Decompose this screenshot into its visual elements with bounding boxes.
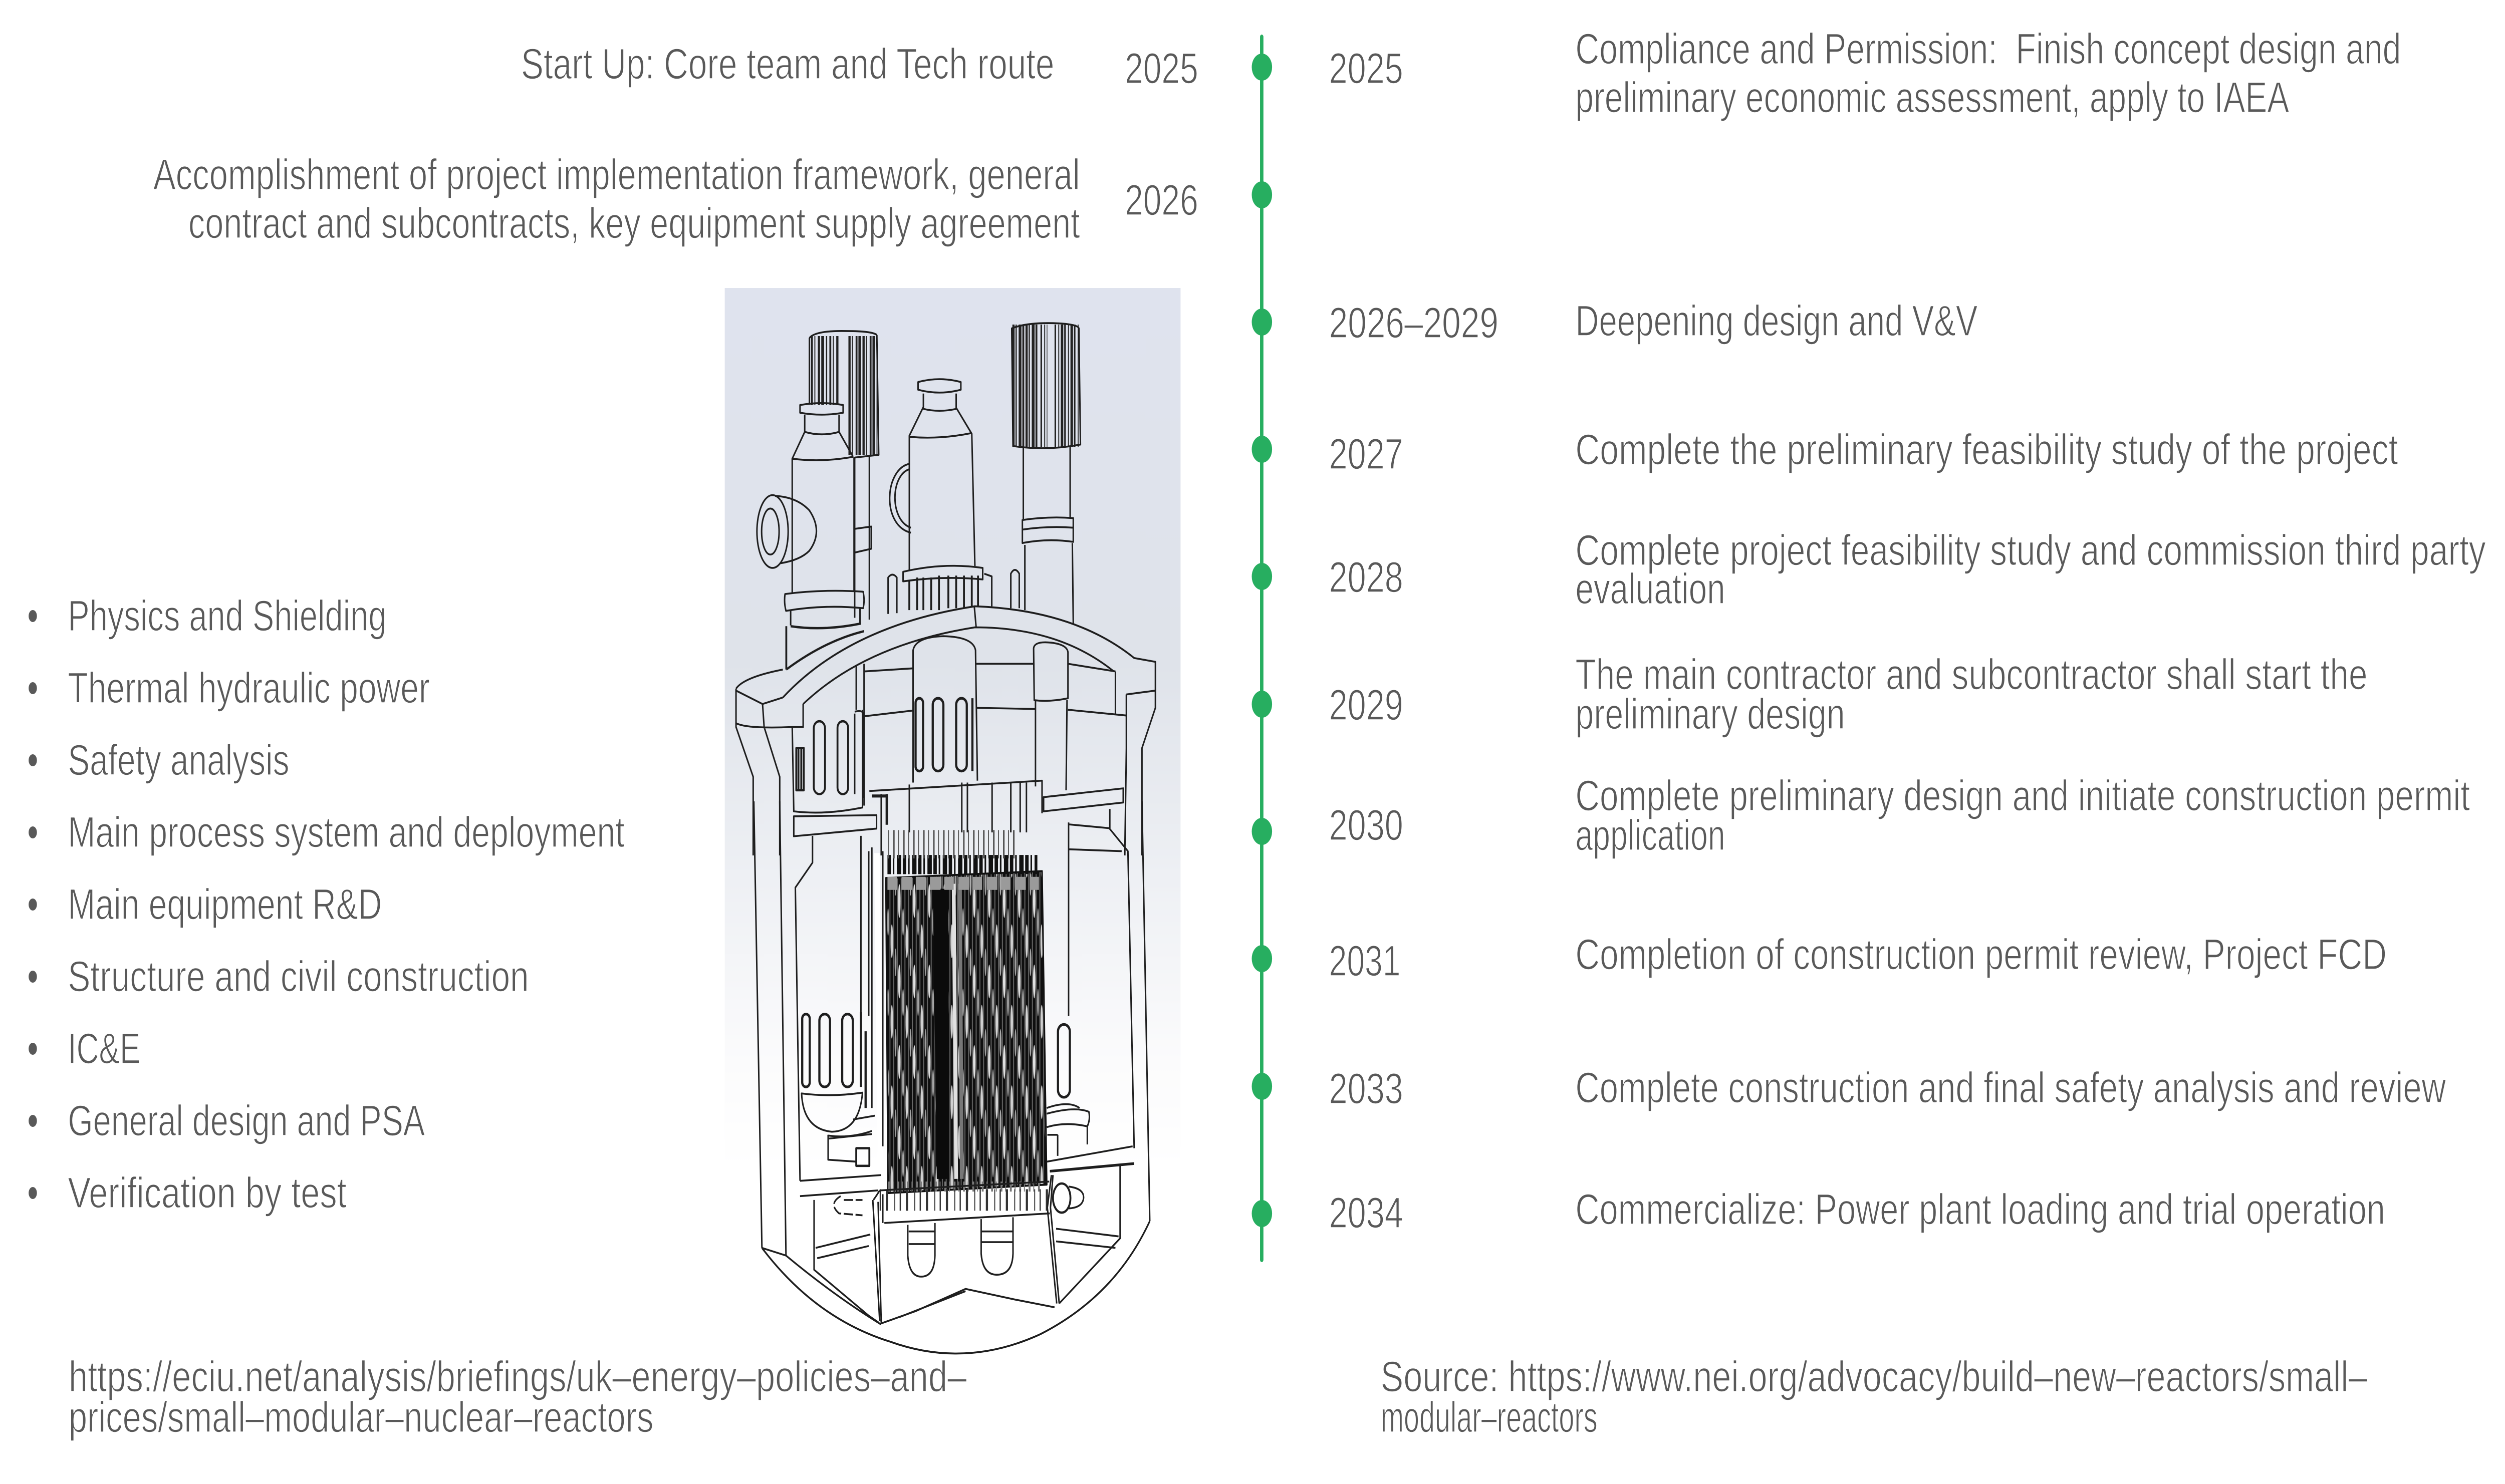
source link right: modular–reactors (1381, 1393, 1598, 1441)
timeline years right (1329, 45, 1498, 1237)
2030 description: Complete preliminary design and initiate construction permit (1575, 772, 2470, 820)
timeline years right: 2034 (1329, 1189, 1403, 1237)
bullet texts: Main equipment R&D (68, 880, 382, 929)
source link left: prices/small–modular–nuclear–reactors (69, 1393, 654, 1441)
white strip beside fuel core (877, 853, 881, 1173)
year label left 2026: 2026 (1125, 176, 1198, 224)
bullet texts: Thermal hydraulic power (68, 664, 430, 712)
milestones left column (153, 40, 1198, 247)
bullet texts: Physics and Shielding (68, 592, 386, 640)
source link left (69, 1353, 967, 1441)
timeline years right: 2031 (1329, 937, 1400, 985)
timeline years right: 2027 (1329, 430, 1403, 478)
bullet texts: General design and PSA (68, 1097, 425, 1145)
milestone: project framework 2026: contract and subcontracts, key equipment supply agreement (188, 199, 1080, 247)
bullet list: work packages (29, 592, 625, 1217)
image background panel (725, 288, 1180, 1362)
2030 description (1575, 772, 2470, 859)
source link left: https://eciu.net/analysis/briefings/uk–energy–policies–and– (69, 1353, 967, 1401)
2028 description: evaluation (1575, 565, 1725, 613)
2030 description: application (1575, 811, 1725, 859)
timeline years right: 2028 (1329, 553, 1403, 602)
timeline years right: 2025 (1329, 45, 1403, 93)
bullet texts: IC&E (68, 1025, 140, 1073)
timeline years right: 2033 (1329, 1065, 1403, 1113)
bullet texts: Safety analysis (68, 736, 289, 784)
2028 description: Complete project feasibility study and commission third party (1575, 526, 2486, 574)
2034 description: Commercialize: Power plant loading and trial operation (1575, 1185, 2385, 1234)
milestone: project framework 2026: Accomplishment of project implementation framework, general (153, 151, 1080, 199)
reactor upper section: nozzles and dome (736, 323, 1155, 855)
2026-2029 description: Deepening design and V&V (1575, 297, 1978, 345)
bullet texts: Main process system and deployment (68, 808, 625, 856)
2025 description (1575, 25, 2401, 122)
bullet texts (68, 592, 625, 1217)
timeline years right: 2030 (1329, 801, 1403, 849)
bullet texts: Verification by test (68, 1169, 347, 1217)
image: reactor cutaway drawing (725, 288, 1180, 1362)
source link right: Source: https://www.nei.org/advocacy/build–new–reactors/small– (1381, 1353, 2368, 1401)
year label left 2025: 2025 (1125, 45, 1198, 93)
bullet markers (29, 610, 37, 1199)
milestone: project framework 2026 (153, 151, 1080, 247)
2029 description (1575, 651, 2368, 738)
2033 description: Complete construction and final safety analysis and review (1575, 1064, 2446, 1112)
timeline axis with dots (1251, 35, 1272, 1262)
reactor lower section: vessel and core (754, 801, 1150, 1354)
timeline descriptions right (1575, 25, 2486, 1234)
milestone: start up 2025: Start Up: Core team and Tech route (521, 40, 1055, 88)
2028 description (1575, 526, 2486, 613)
2027 description: Complete the preliminary feasibility study of the project (1575, 426, 2398, 474)
2025 description: Compliance and Permission: Finish concept design and (1575, 25, 2401, 73)
timeline years right: 2029 (1329, 681, 1403, 729)
2031 description: Completion of construction permit review, Project FCD (1575, 931, 2387, 979)
2029 description: preliminary design (1575, 690, 1845, 738)
bullet texts: Structure and civil construction (68, 953, 529, 1001)
2025 description: preliminary economic assessment, apply to IAEA (1575, 74, 2289, 122)
timeline years right: 2026–2029 (1329, 299, 1498, 347)
fuel core block (886, 844, 1047, 1193)
2029 description: The main contractor and subcontractor shall start the (1575, 651, 2368, 699)
source link right (1381, 1353, 2368, 1441)
